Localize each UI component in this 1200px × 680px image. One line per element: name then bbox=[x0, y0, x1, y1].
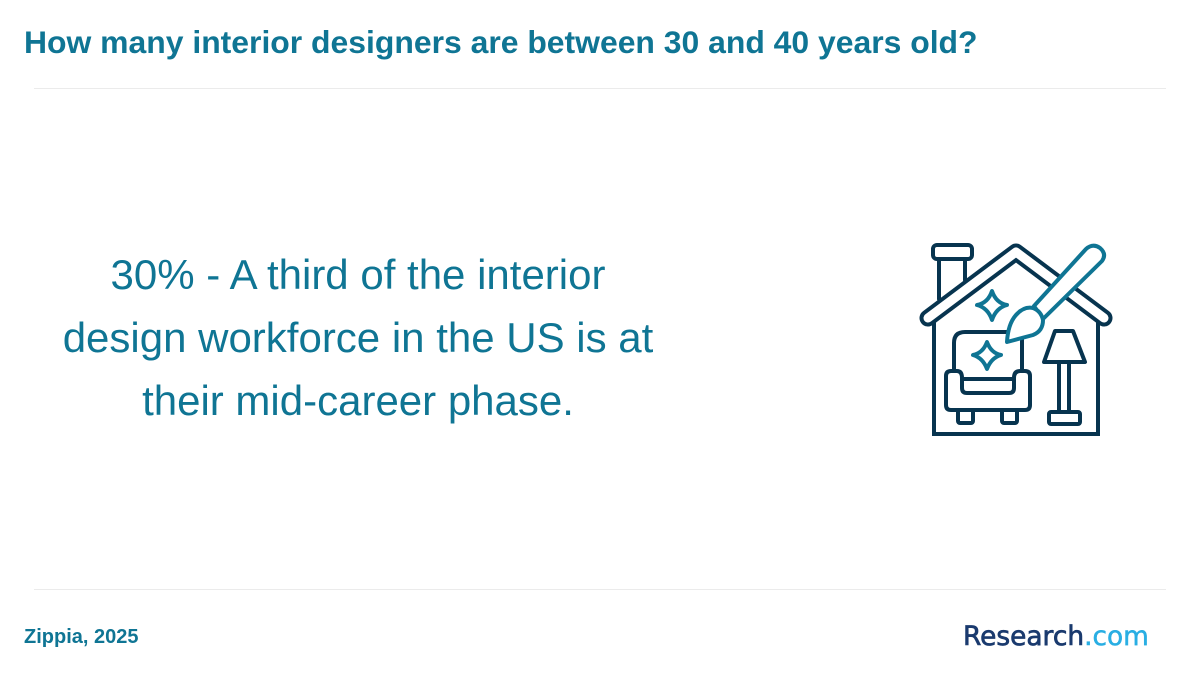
icon: house with armchair, lamp and paintbrush bbox=[920, 243, 1112, 436]
icon: sparkle lower bbox=[973, 342, 1001, 369]
icon: paintbrush bbox=[1007, 246, 1104, 342]
main statement text: their mid-career phase. bbox=[142, 377, 574, 424]
main statement text: 30% - A third of the interior bbox=[111, 251, 605, 298]
icon: roof bbox=[928, 252, 1104, 318]
main statement text bbox=[63, 251, 653, 424]
icon: floor lamp bbox=[1044, 331, 1085, 424]
main statement text: design workforce in the US is at bbox=[63, 314, 653, 361]
icon: armchair bbox=[946, 332, 1030, 423]
logo: Research.com: Research.com bbox=[963, 621, 1149, 652]
title: How many interior designers are between 30 and 40 years old? bbox=[24, 24, 978, 60]
source: Zippia, 2025 bbox=[24, 626, 138, 648]
icon: chimney bbox=[933, 245, 972, 299]
icon: house walls bbox=[934, 322, 1098, 434]
icon: sparkle upper bbox=[977, 291, 1007, 320]
